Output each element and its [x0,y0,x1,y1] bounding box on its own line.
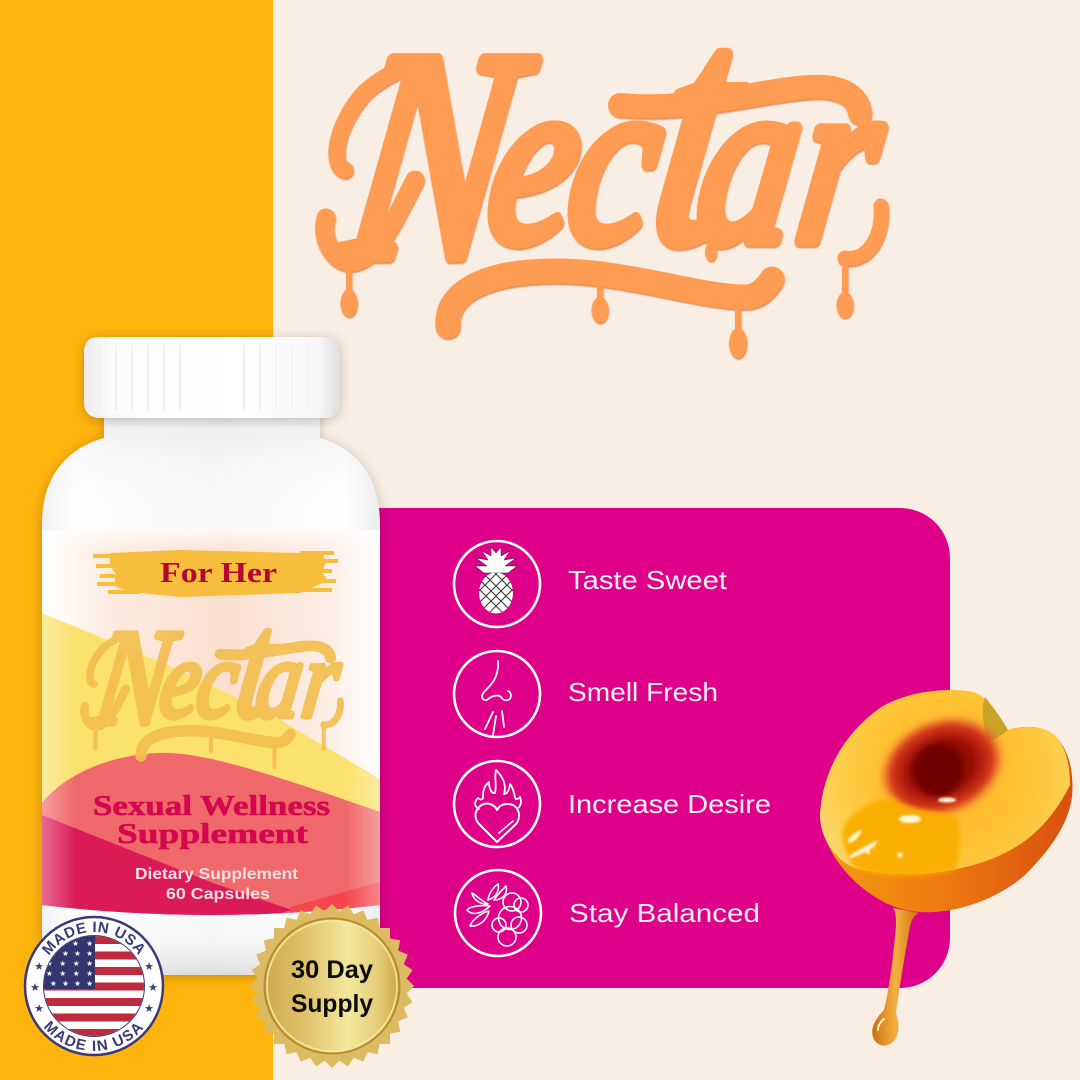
seal text: 30 Day: 30 Day [291,956,373,984]
flag: ★ ★ ★ ★ [46,959,93,968]
nectar pool [843,797,960,876]
nectar drip [872,908,919,1046]
ring stars: ★ [34,1003,44,1015]
label: Increase Desire: Increase Desire [568,789,771,819]
label: Smell Fresh: Smell Fresh [568,677,718,707]
ring stars: ★ [148,982,158,994]
benefit: Stay Balanced [455,870,760,956]
icon: nose [454,651,540,737]
label yellow wave [42,613,380,812]
ring text bottom: MADE IN USA [44,1020,144,1051]
logo wordmark: ar [684,27,897,293]
benefit: Taste Sweet [454,541,728,627]
brush stroke [93,550,338,597]
bottle body [42,410,380,975]
ring stars: ★ [144,1003,154,1015]
icon: pineapple [454,541,540,627]
left yellow band [0,0,273,1080]
Dietary Supplement: Dietary Supplement [135,866,299,883]
seal gold disc [264,918,400,1054]
60 Capsules: 60 Capsules [166,886,270,903]
label logo swashes [84,637,340,767]
label logo wordmark: ec [153,618,247,741]
logo wordmark: ec [475,27,677,293]
label logo wordmark: t [227,581,288,749]
flag: ★ ★ ★ ★ [50,979,93,988]
peach with dripping nectar [820,690,1072,1046]
bottle cap [84,337,340,418]
icon: flaming heart [454,761,540,847]
logo swashes and drips [325,66,881,344]
flag: ★ ★ ★ ★ [46,969,93,978]
peach pit [862,696,1022,838]
highlights [848,798,956,858]
flag: ★ ★ ★ [58,939,93,948]
icon: berries [455,870,541,956]
benefit: Smell Fresh [454,651,718,737]
bottle label [42,530,380,925]
flag: ★ ★ ★ ★ [50,949,93,958]
peach stem notch shadow [983,697,1008,742]
seal starburst [250,904,414,1068]
seal text: Supply: Supply [291,990,373,1018]
badge: Made in USA [24,916,164,1056]
label salmon wave [42,753,380,925]
label logo [84,581,353,767]
label red wedge [290,882,380,913]
flag [44,936,144,1037]
label: Stay Balanced: Stay Balanced [569,898,760,928]
Sexual Wellness: Sexual Wellness [93,790,330,822]
label logo wordmark: ar [250,618,348,741]
ring stars: ★ [30,982,40,994]
ring stars: ★ [144,961,154,973]
peach skin [820,690,1072,912]
logo: Nectar [325,0,909,358]
drip beads [340,243,854,358]
label crimson wave [42,815,292,925]
Supplement: Supplement [117,818,308,850]
badge: 30 Day Supply seal [250,904,414,1068]
ring stars: ★ [34,961,44,973]
For Her: For Her [160,558,277,589]
ring text top: MADE IN USA [42,922,144,955]
pink benefits panel [360,508,950,988]
product bottle [42,337,380,975]
label logo wordmark: N [85,602,187,754]
benefit: Increase Desire [454,761,771,847]
peach flesh [820,690,1070,874]
label edge sheen [42,613,380,908]
label: Taste Sweet: Taste Sweet [568,565,728,595]
